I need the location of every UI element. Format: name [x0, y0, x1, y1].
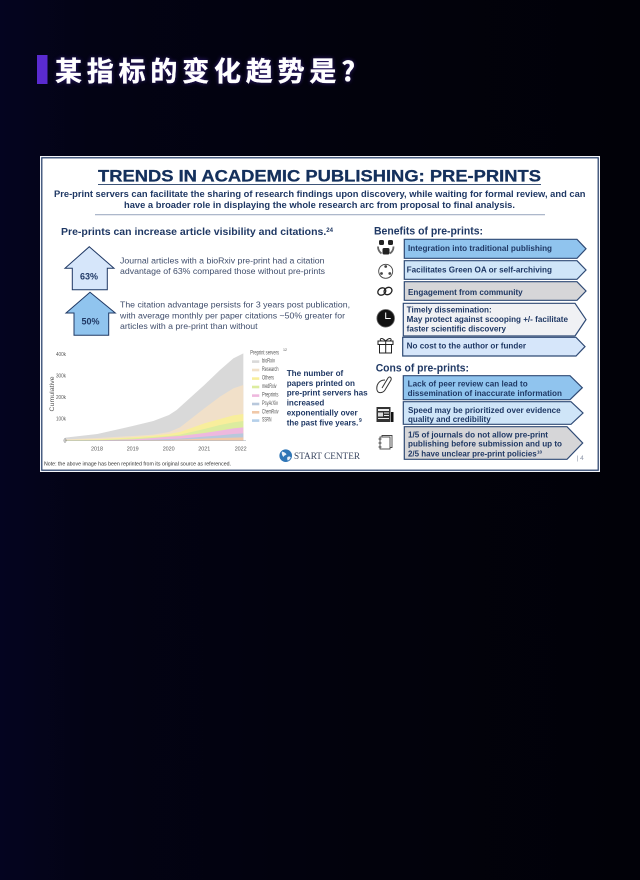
- benefit 5: No cost to the author or funder: [407, 341, 526, 350]
- stat: 63% arrow: 63%: [80, 272, 98, 282]
- chart legend: ChemRxiv: [262, 409, 278, 415]
- benefit 5: [403, 337, 585, 356]
- chart legend: [250, 348, 287, 424]
- slide title: TRENDS IN ACADEMIC PUBLISHING: PRE-PRINTS: [98, 168, 541, 186]
- stacked area chart: 100k: [56, 417, 66, 423]
- stat text: 50%: The citation advantage persists for 3 years post publication,: [120, 300, 350, 310]
- chart legend: PsyArXiv: [262, 401, 278, 407]
- stat: 50% arrow: 50%: [81, 316, 100, 326]
- title accent bar: [37, 55, 48, 84]
- stacked area chart: 2018: [91, 446, 103, 452]
- benefit 1: [404, 239, 586, 258]
- stat text: 50%: with average monthly per paper citations ~50% greater for: [119, 310, 345, 320]
- benefit 3: Engagement from community: [408, 288, 523, 297]
- chart legend: Others: [262, 376, 274, 382]
- chart legend: Preprints: [262, 393, 278, 399]
- con 3: 1/5 of journals do not allow pre-print: [408, 430, 548, 439]
- con 3: 10: [537, 450, 543, 454]
- icon: clock: [377, 310, 395, 327]
- chart callout: increased: [287, 398, 324, 408]
- stacked area chart: 300k: [56, 373, 66, 379]
- con 1: Lack of peer review can lead to: [408, 380, 528, 389]
- chart legend: Research: [262, 367, 278, 373]
- chart callout: 9: [359, 418, 362, 424]
- stat text: 63%: [120, 255, 325, 276]
- icon: notebook: [378, 436, 392, 449]
- logo: start center: [279, 449, 361, 462]
- icon: linked rings: [376, 286, 393, 297]
- stacked area chart: Cumulative: [50, 376, 56, 412]
- stat text: 63%: Journal articles with a bioRxiv pre-print had a citation: [120, 255, 325, 265]
- con 1: dissemination of inaccurate information: [408, 389, 562, 398]
- stacked area chart: 2019: [127, 446, 139, 452]
- left heading: 24: [326, 228, 334, 234]
- con 3: publishing before submission and up to: [408, 440, 562, 449]
- stat text: 50%: [119, 300, 350, 331]
- benefit 1: Integration into traditional publishing: [408, 244, 552, 253]
- chart callout: papers printed on: [287, 378, 355, 388]
- logo: start center: START CENTER: [294, 452, 361, 462]
- stat text: 50%: articles with a pre-print than without: [120, 321, 258, 331]
- slide intro: have a broader role in displaying the whole research arc from proposal to final analysis.: [124, 200, 515, 210]
- left heading: Pre-prints can increase article visibility and citations.: [61, 227, 324, 238]
- stacked area chart: 2020: [163, 446, 175, 452]
- con 2: Speed may be prioritized over evidence: [408, 406, 561, 415]
- chart callout: exponentially over: [287, 407, 358, 417]
- con 3: 2/5 have unclear pre-print policies: [408, 449, 537, 458]
- title text: 某指标的变化趋势是?: [55, 50, 360, 89]
- slide intro: Pre-print servers can facilitate the sharing of research findings upon discovery, while waiting for formal review, and can: [54, 189, 586, 199]
- panel: slide: [40, 156, 600, 472]
- chart legend: Preprint servers: [250, 350, 279, 356]
- benefit 3: [404, 282, 586, 300]
- stat: 63% arrow: [65, 247, 114, 290]
- icon: newspaper: [376, 407, 394, 422]
- con 1: [403, 376, 582, 400]
- benefit 2: [404, 261, 586, 279]
- title glow: 某指标的变化趋势是?: [55, 50, 360, 89]
- stacked area chart: 0: [64, 438, 66, 444]
- stacked area chart: [50, 352, 247, 452]
- cons heading: Cons of pre-prints:: [376, 363, 469, 375]
- benefit 2: Facilitates Green OA or self-archiving: [407, 266, 552, 275]
- stat: 50% arrow: [66, 292, 115, 335]
- icon: people network: [378, 240, 394, 254]
- benefit 4: [403, 303, 586, 336]
- chart legend: bioRxiv: [262, 359, 275, 365]
- chart legend: SSRN: [262, 418, 272, 424]
- benefit 4: Timely dissemination:: [407, 305, 492, 314]
- stacked area chart: 2022: [235, 446, 247, 452]
- benefit 4: faster scientific discovery: [407, 325, 507, 334]
- chart callout: the past five years.: [287, 417, 358, 427]
- stacked area chart: 400k: [56, 352, 66, 358]
- stacked area chart: 200k: [56, 395, 66, 401]
- chart callout: The number of: [287, 368, 343, 378]
- stat text: 63%: advantage of 63% compared those without pre-prints: [120, 266, 325, 276]
- con 3: [404, 427, 583, 459]
- source note: Note: the above image has been reprinted from its original source as referenced.: [44, 461, 231, 467]
- title: [37, 50, 360, 89]
- icon: gift: [378, 339, 393, 353]
- chart callout: pre-print servers has: [287, 388, 368, 398]
- con 2: [403, 402, 583, 424]
- benefits heading: Benefits of pre-prints:: [374, 225, 483, 237]
- icon: quill and clip: [377, 377, 391, 393]
- icon: self-archiving cycle: [379, 264, 393, 278]
- chart legend: 12: [283, 348, 287, 352]
- benefit 4: May protect against scooping +/- facilitate: [407, 315, 569, 324]
- chart callout: [287, 368, 368, 427]
- con 2: quality and credibility: [408, 415, 491, 424]
- stacked area chart: 2021: [198, 446, 210, 452]
- slide intro: [54, 189, 586, 210]
- page number: | 4: [577, 455, 584, 462]
- chart legend: medRxiv: [262, 384, 276, 390]
